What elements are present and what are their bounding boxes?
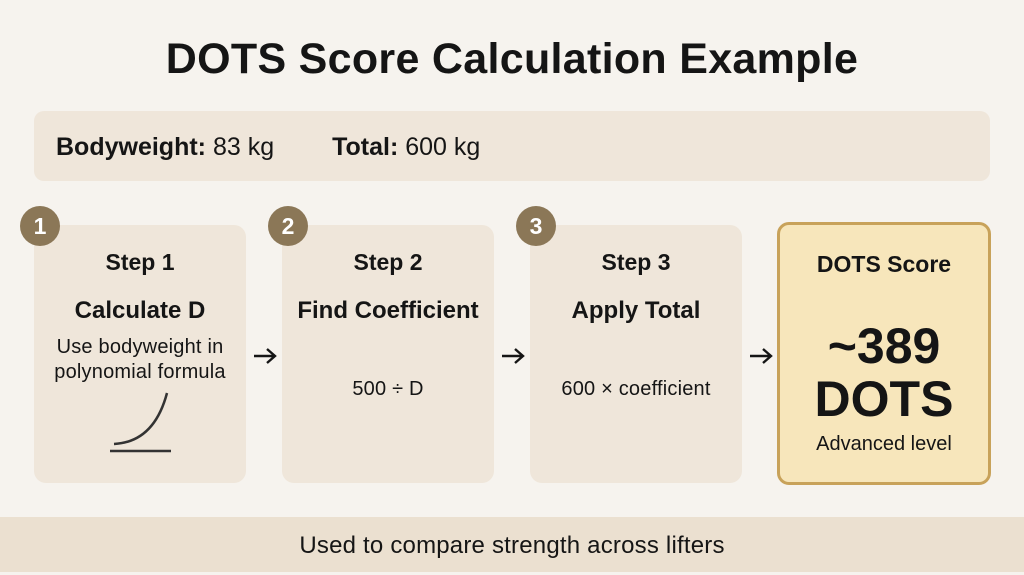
icon: curve [110,392,171,452]
panel: step 2: Step 2 [353,249,423,275]
panel: step 1: Step 1 [105,249,175,275]
arrow 3 [750,348,773,364]
info bar [34,111,990,181]
footer: Used to compare strength across lifters [299,532,725,559]
panel: step 2: Find Coefficient [297,297,479,324]
title: DOTS Score Calculation Example [166,35,858,83]
badge 3: 3 [530,213,542,239]
panel: step 3 [530,225,742,483]
panel: step 1: Use bodyweight in [57,336,223,358]
badge 3 [516,206,556,246]
badge 1 [20,206,60,246]
panel: step 3: Apply Total [572,297,700,324]
badge 1: 1 [34,213,46,239]
panel: step 3: 600 × coefficient [561,378,711,400]
panel: step 1 [34,225,246,483]
footer [0,517,1024,572]
panel: step 2: 500 ÷ D [352,378,424,400]
panel: step 2 [282,225,494,483]
badge 2 [268,206,308,246]
panel: result: Advanced level [816,433,952,455]
panel: result: ~389 [828,318,940,374]
panel: step 1: polynomial formula [54,361,226,383]
panel: result: DOTS [815,371,953,427]
arrow 2 [502,348,525,364]
info bar: Bodyweight: 83 kg Total: 600 kg [56,133,480,161]
badge 2: 2 [282,213,294,239]
panel: result [777,222,991,485]
panel: result: DOTS Score [817,251,951,277]
panel: step 3: Step 3 [601,249,671,275]
panel: step 1: Calculate D [75,297,205,324]
arrow 1 [254,348,277,364]
